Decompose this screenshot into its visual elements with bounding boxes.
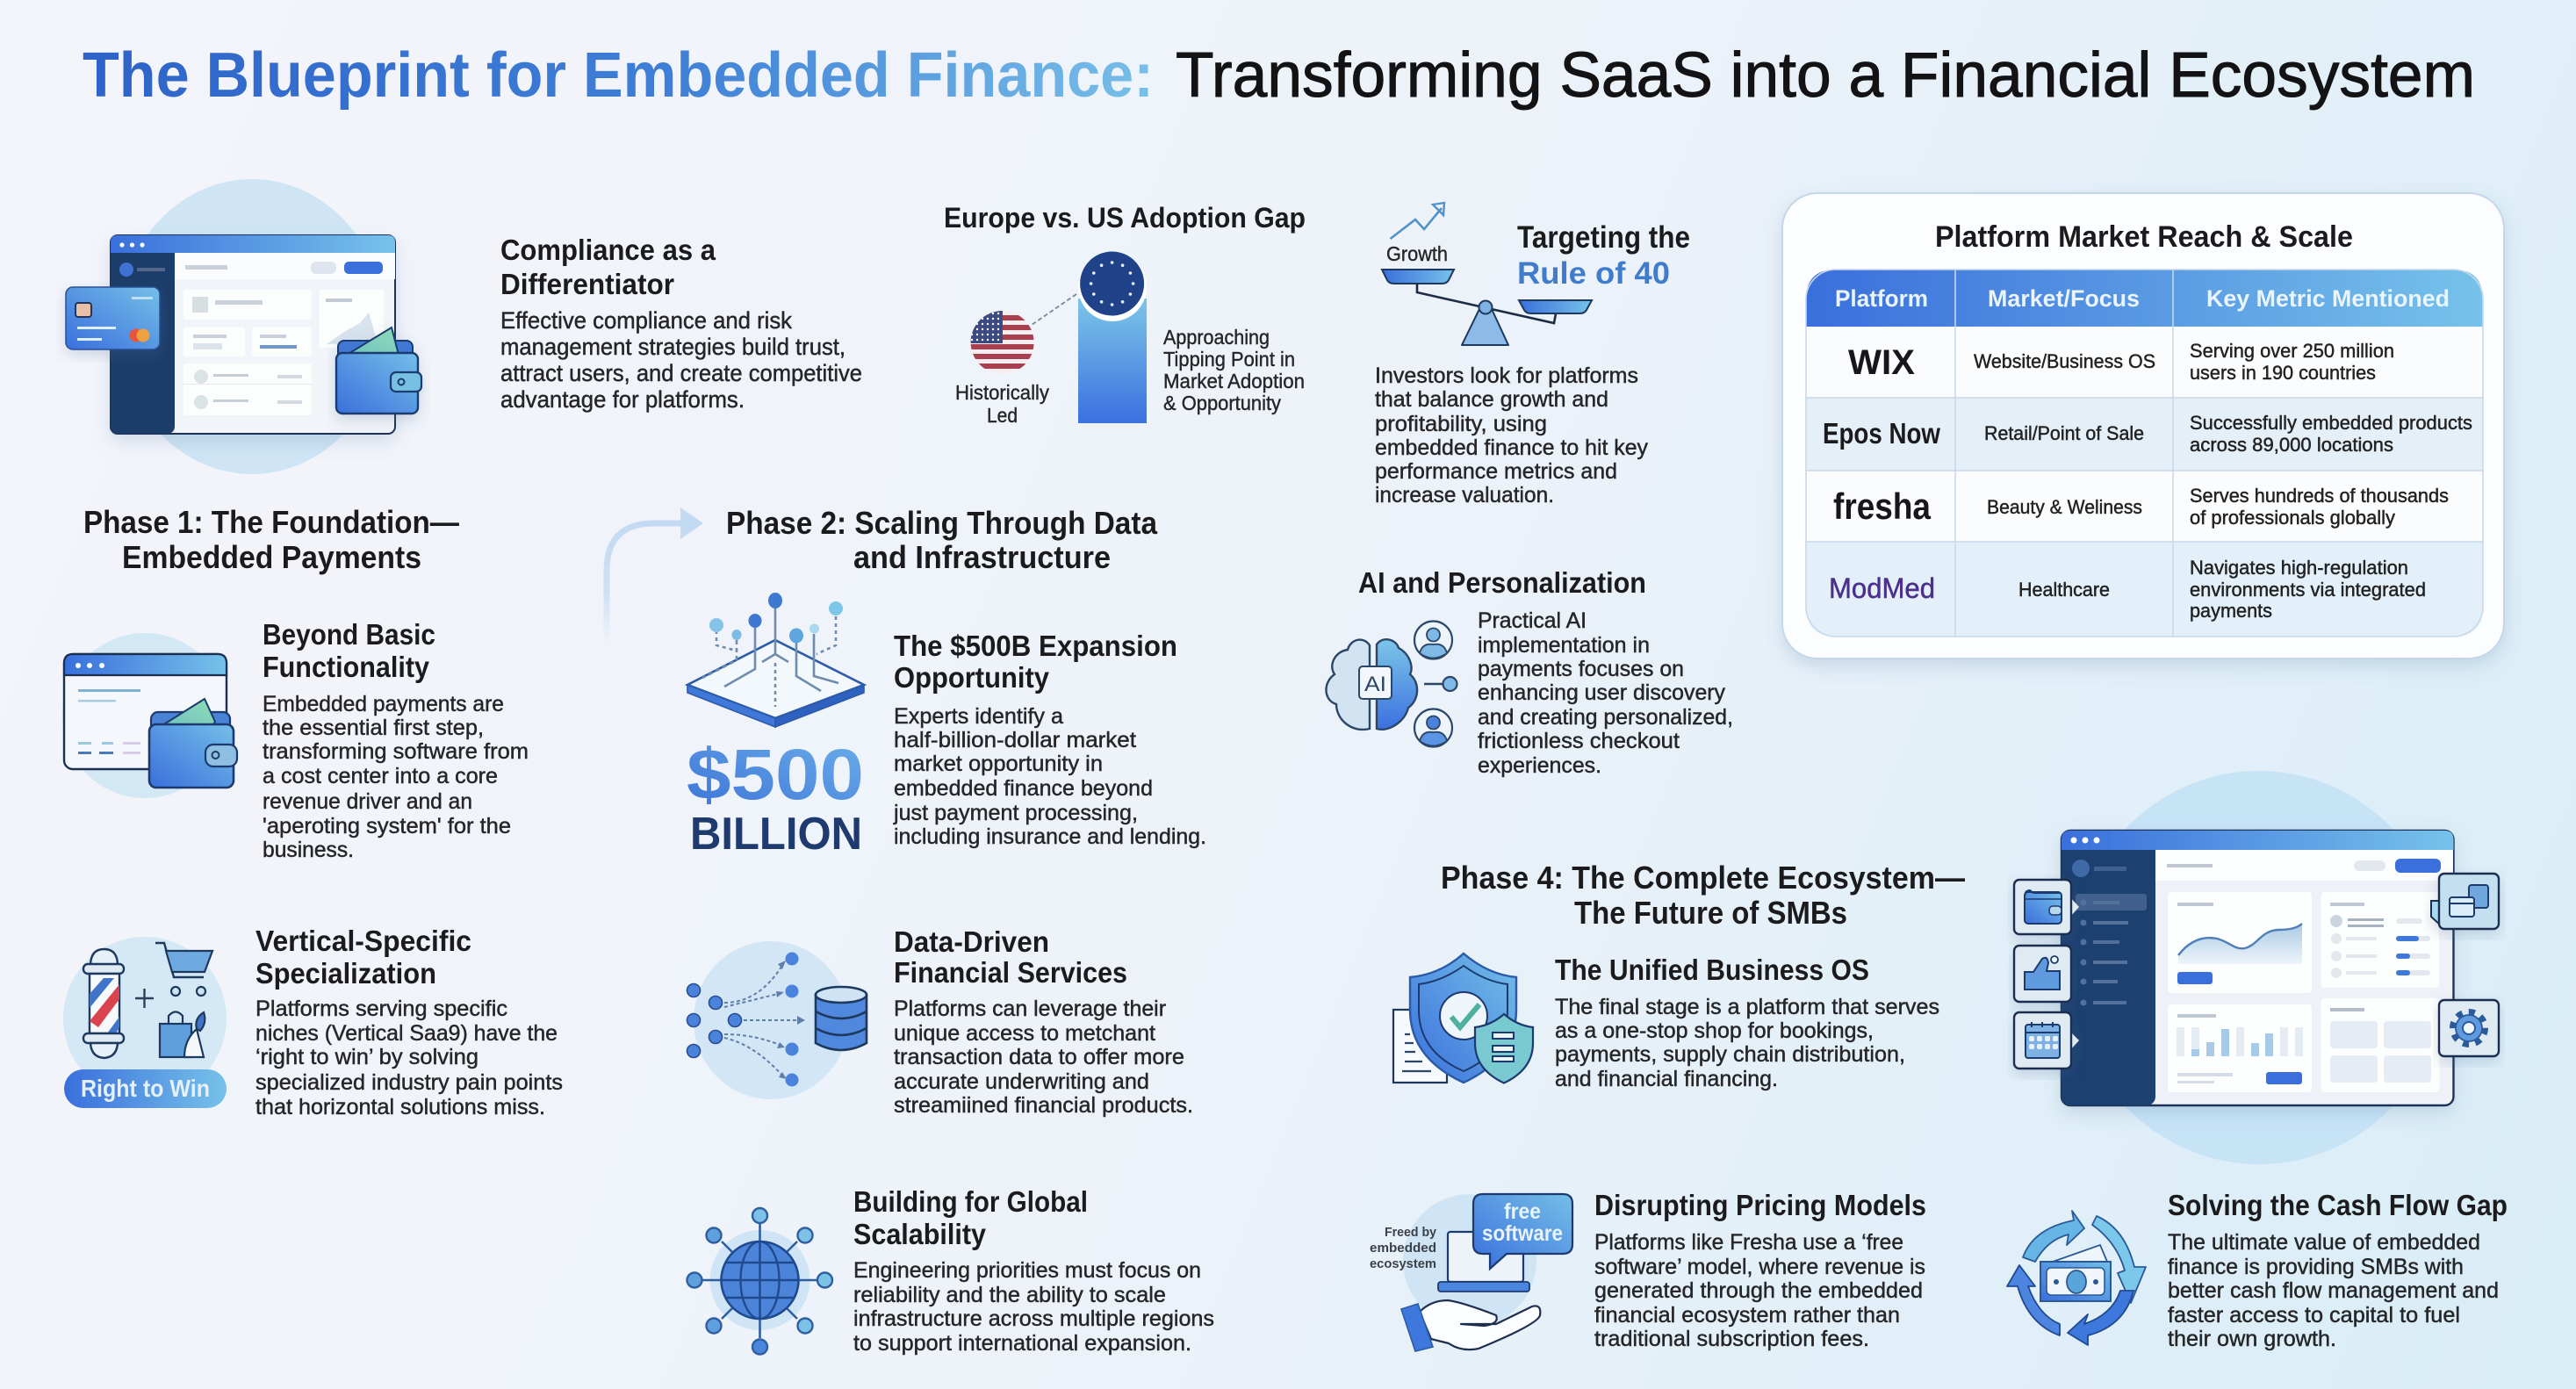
row: Wix: Website/Business OS bbox=[1974, 350, 2155, 372]
text block: vertical-specific specialization: that horizontal solutions miss. bbox=[255, 1095, 545, 1119]
card: line chart bbox=[2168, 892, 2312, 993]
label: approaching tipping point bbox=[1163, 326, 1305, 414]
title bbox=[83, 40, 2475, 111]
row: ModMed bbox=[1829, 557, 2426, 622]
text block: vertical-specific specialization: niches (Vertical Saa9) have the bbox=[255, 1021, 558, 1046]
card: bar chart bbox=[2168, 1004, 2312, 1092]
text block: building for global scalability: to support international expansion. bbox=[853, 1331, 1191, 1356]
text block: disrupting pricing models: software’ model, where revenue is bbox=[1594, 1255, 1925, 1279]
text block: vertical-specific specialization: ‘right to win’ by solving bbox=[255, 1045, 479, 1069]
icon: free software hand and laptop bbox=[1370, 1194, 1572, 1351]
header row: Market/Focus bbox=[1988, 285, 2140, 312]
label: freed by embedded ecosystem: Freed by bbox=[1385, 1225, 1437, 1240]
heading: Europe vs. US Adoption Gap bbox=[944, 202, 1306, 234]
text block: compliance as a differentiator: attract users, and create competitive bbox=[500, 360, 862, 386]
text block: data-driven financial services: transaction data to offer more bbox=[894, 1045, 1184, 1069]
speech bubble: free software: software bbox=[1482, 1221, 1563, 1246]
row: Epos Now bbox=[1823, 412, 2472, 456]
row: Epos Now: across 89,000 locations bbox=[2190, 434, 2393, 456]
heading bbox=[1517, 220, 1690, 291]
text block: disrupting pricing models: Platforms like Fresha use a ‘free bbox=[1594, 1230, 1903, 1255]
icon: US flag bbox=[970, 311, 1034, 374]
body text: AI and personalization: experiences. bbox=[1478, 753, 1601, 778]
text block: $500B expansion opportunity: embedded finance beyond bbox=[894, 776, 1153, 801]
label: freed by embedded ecosystem: ecosystem bbox=[1370, 1256, 1436, 1271]
text block: unified business OS: The final stage is a platform that serves bbox=[1555, 995, 1939, 1019]
text block: building for global scalability: Engineering priorities must focus on bbox=[853, 1258, 1201, 1283]
body text: AI and personalization: implementation in bbox=[1478, 633, 1650, 658]
icon: banknote bbox=[2040, 1245, 2111, 1301]
label: freed by embedded ecosystem bbox=[1370, 1225, 1437, 1271]
icon: person bottom bbox=[1414, 709, 1452, 746]
text block: compliance as a differentiator: Effective compliance and risk bbox=[500, 307, 793, 334]
text block: $500B expansion opportunity: including insurance and lending. bbox=[894, 824, 1206, 849]
text block: compliance as a differentiator bbox=[500, 234, 862, 413]
text block: unified business OS: as a one-stop shop for bookings, bbox=[1555, 1018, 1874, 1043]
text block: $500B expansion opportunity: half-billion-dollar market bbox=[894, 728, 1136, 752]
text block: vertical-specific specialization: Vertical-Specific bbox=[255, 925, 471, 957]
text block: beyond basic functionality: Beyond Basic bbox=[263, 618, 435, 651]
label: freed by embedded ecosystem: embedded bbox=[1370, 1241, 1436, 1256]
row: Epos Now: Successfully embedded products bbox=[2190, 412, 2472, 434]
text block: disrupting pricing models: Disrupting Pricing Models bbox=[1594, 1189, 1926, 1221]
text block: solving the cash flow gap bbox=[2168, 1189, 2508, 1351]
text block: data-driven financial services: accurate underwriting and bbox=[894, 1069, 1149, 1094]
label: approaching tipping point: Tipping Point in bbox=[1163, 348, 1295, 371]
label: historically led: Historically bbox=[955, 381, 1049, 404]
text block: vertical-specific specialization bbox=[255, 925, 563, 1119]
text block: unified business OS bbox=[1555, 954, 1939, 1091]
illustration: complete ecosystem dashboard bbox=[2014, 771, 2499, 1164]
icon: window with wallet bbox=[62, 633, 237, 798]
heading: phase 2 bbox=[726, 505, 1158, 575]
table heading: Platform Market Reach & Scale bbox=[1935, 220, 2353, 254]
label: approaching tipping point: Market Adoption bbox=[1163, 370, 1305, 392]
icon: database bbox=[816, 987, 867, 1050]
heading: phase 4 bbox=[1441, 860, 1965, 931]
credit card bbox=[66, 287, 160, 349]
dashboard window bbox=[111, 235, 395, 434]
header row bbox=[1835, 285, 2450, 312]
row: ModMed: ModMed bbox=[1829, 572, 1935, 604]
body text: AI and personalization: enhancing user discovery bbox=[1478, 680, 1725, 705]
label: historically led: Led bbox=[987, 404, 1018, 427]
dashboard window bbox=[2062, 831, 2453, 1105]
row: Fresha: Serves hundreds of thousands bbox=[2190, 485, 2449, 507]
text block: building for global scalability: infrastructure across multiple regions bbox=[853, 1306, 1214, 1331]
text block: beyond basic functionality: Functionality bbox=[263, 651, 430, 683]
tile: gear bbox=[2439, 1000, 2499, 1056]
row: Epos Now: Epos Now bbox=[1823, 417, 1940, 450]
text block: compliance as a differentiator: Differentiator bbox=[500, 268, 674, 300]
label: historically led bbox=[955, 381, 1049, 427]
body text: AI and personalization: and creating personalized, bbox=[1478, 705, 1733, 730]
panel: Europe vs US adoption gap bbox=[944, 202, 1306, 427]
text block: compliance as a differentiator: management strategies build trust, bbox=[500, 334, 845, 360]
heading: phase 2: and Infrastructure bbox=[853, 539, 1111, 575]
text block: solving the cash flow gap: their own growth. bbox=[2168, 1327, 2336, 1351]
heading: phase 2: Phase 2: Scaling Through Data bbox=[726, 505, 1158, 541]
text block: beyond basic functionality bbox=[263, 618, 529, 862]
text block: vertical-specific specialization: Platforms serving specific bbox=[255, 997, 507, 1021]
table bbox=[1806, 270, 2483, 637]
text block: beyond basic functionality: a cost center into a core bbox=[263, 764, 498, 788]
row: Fresha: fresha bbox=[1833, 486, 1932, 527]
body text bbox=[1375, 363, 1648, 507]
dashed connector bbox=[1032, 294, 1076, 325]
text block: disrupting pricing models: financial ecosystem rather than bbox=[1594, 1303, 1900, 1328]
speech bubble: free software bbox=[1473, 1194, 1572, 1269]
text block: unified business OS: and financial financing. bbox=[1555, 1067, 1778, 1091]
heading: Targeting the bbox=[1517, 220, 1690, 255]
text block: building for global scalability: Building for Global bbox=[853, 1185, 1088, 1218]
icon: bag and bottle bbox=[160, 1011, 205, 1057]
heading: phase 4: The Future of SMBs bbox=[1574, 895, 1847, 931]
title: Transforming SaaS into a Financial Ecosystem bbox=[1176, 40, 2475, 111]
header row: Platform bbox=[1835, 285, 1928, 312]
heading: Rule of 40 bbox=[1517, 256, 1670, 291]
icon: EU flag bbox=[1080, 251, 1144, 316]
text block: data-driven financial services: unique access to metchant bbox=[894, 1021, 1155, 1046]
row: ModMed: environments via integrated bbox=[2190, 579, 2426, 601]
row: Fresha: Beauty & Weliness bbox=[1987, 496, 2142, 518]
icon: shopping cart bbox=[155, 943, 212, 996]
text block: solving the cash flow gap: faster access to capital to fuel bbox=[2168, 1303, 2460, 1328]
text block: unified business OS: payments, supply chain distribution, bbox=[1555, 1042, 1905, 1067]
illustration: dashboard with card and wallet bbox=[66, 179, 421, 474]
row: ModMed: payments bbox=[2190, 600, 2272, 622]
text block: vertical-specific specialization: specialized industry pain points bbox=[255, 1070, 563, 1095]
text block: beyond basic functionality: transforming software from bbox=[263, 739, 529, 764]
heading: phase 4: Phase 4: The Complete Ecosystem— bbox=[1441, 860, 1965, 896]
text block: disrupting pricing models: traditional subscription fees. bbox=[1594, 1327, 1869, 1351]
icon: data flow to database bbox=[687, 941, 867, 1099]
heading: phase 1: Phase 1: The Foundation— bbox=[83, 504, 459, 540]
text block: $500B expansion opportunity: market opportunity in bbox=[894, 752, 1103, 776]
body text: AI and personalization: Practical AI bbox=[1478, 608, 1587, 633]
arrow: phase 1 to phase 2 bbox=[607, 507, 703, 645]
body text: profitability, using bbox=[1375, 412, 1547, 436]
body text: increase valuation. bbox=[1375, 483, 1554, 507]
text block: building for global scalability: reliability and the ability to scale bbox=[853, 1283, 1166, 1307]
tile: wallet bbox=[2014, 880, 2079, 934]
stat: $500 billion bbox=[687, 735, 864, 860]
text block: beyond basic functionality: 'aperoting system' for the bbox=[263, 814, 511, 838]
body text: AI and personalization bbox=[1478, 608, 1733, 778]
text block: $500B expansion opportunity bbox=[893, 630, 1206, 849]
stat: $500 billion: BILLION bbox=[690, 809, 862, 860]
text block: compliance as a differentiator: advantage for platforms. bbox=[500, 386, 745, 413]
pill: right to win bbox=[64, 1069, 227, 1108]
text block: beyond basic functionality: revenue driver and an bbox=[263, 789, 472, 814]
text block: beyond basic functionality: Embedded payments are bbox=[263, 692, 504, 716]
row: ModMed: Navigates high-regulation bbox=[2190, 557, 2408, 579]
row: Wix bbox=[1848, 340, 2394, 384]
bar: adoption bbox=[1078, 299, 1147, 423]
tile: calendar bbox=[2014, 1012, 2079, 1069]
body text: AI and personalization: frictionless checkout bbox=[1478, 729, 1680, 753]
text block: solving the cash flow gap: finance is providing SMBs with bbox=[2168, 1255, 2464, 1279]
text block: $500B expansion opportunity: Experts identify a bbox=[894, 704, 1063, 729]
text block: $500B expansion opportunity: just payment processing, bbox=[893, 801, 1138, 825]
icon: open hand bbox=[1401, 1300, 1540, 1351]
row: Wix: Serving over 250 million bbox=[2190, 340, 2394, 362]
text block: data-driven financial services: Financial Services bbox=[894, 956, 1127, 989]
text block: compliance as a differentiator: Compliance as a bbox=[500, 234, 716, 266]
body text: Investors look for platforms bbox=[1375, 363, 1638, 388]
row: Wix: WIX bbox=[1848, 343, 1915, 382]
label: approaching tipping point: Approaching bbox=[1163, 326, 1270, 349]
row: Fresha: of professionals globally bbox=[2190, 507, 2395, 529]
row: Fresha bbox=[1833, 485, 2449, 529]
body text: performance metrics and bbox=[1375, 459, 1617, 484]
text block: disrupting pricing models: generated through the embedded bbox=[1594, 1278, 1923, 1303]
icon: circuit platform bbox=[687, 593, 864, 727]
body text: that balance growth and bbox=[1375, 387, 1608, 412]
icon: network globe bbox=[687, 1208, 832, 1354]
card: list with progress bbox=[2321, 892, 2439, 988]
card: tiles bbox=[2321, 998, 2439, 1092]
text block: $500B expansion opportunity: Opportunity bbox=[894, 661, 1050, 694]
icon: barber pole bbox=[83, 949, 124, 1058]
icon: balance scale with growth arrow: Growth bbox=[1386, 242, 1448, 265]
text block: data-driven financial services: Platforms can leverage their bbox=[894, 997, 1166, 1021]
row: Epos Now: Retail/Point of Sale bbox=[1984, 422, 2144, 444]
text block: data-driven financial services: Data-Driven bbox=[894, 925, 1049, 958]
icon: laptop bbox=[1438, 1232, 1529, 1292]
heading: AI and personalization: AI and Personalization bbox=[1358, 566, 1646, 599]
icon: balance scale with growth arrow bbox=[1382, 203, 1592, 345]
panel: platform market reach table bbox=[1782, 193, 2504, 659]
stat: $500 billion: $500 bbox=[687, 735, 864, 815]
icon: AI brain bbox=[1326, 622, 1457, 746]
icon: right to win niche icons bbox=[63, 937, 227, 1108]
heading: phase 1 bbox=[83, 504, 459, 575]
text block: data-driven financial services: streamiined financial products. bbox=[894, 1093, 1193, 1118]
icon: small shield bbox=[1475, 1014, 1533, 1083]
label: approaching tipping point: & Opportunity bbox=[1163, 392, 1281, 414]
text block: disrupting pricing models bbox=[1594, 1189, 1926, 1351]
text block: solving the cash flow gap: Solving the Cash Flow Gap bbox=[2168, 1189, 2508, 1221]
icon: AI brain: AI bbox=[1364, 673, 1386, 696]
icon: shield with document bbox=[1393, 954, 1533, 1083]
wallet bbox=[336, 327, 421, 414]
text block: solving the cash flow gap: better cash flow management and bbox=[2168, 1278, 2499, 1303]
icon: person top bbox=[1414, 622, 1452, 659]
heading: phase 1: Embedded Payments bbox=[122, 539, 421, 575]
body text: AI and personalization: payments focuses on bbox=[1478, 657, 1684, 681]
cycle arrows bbox=[2007, 1211, 2146, 1345]
tile: cards bbox=[2431, 874, 2499, 929]
tile: thumbs up bbox=[2014, 946, 2071, 1002]
text block: data-driven financial services bbox=[894, 925, 1193, 1118]
text block: beyond basic functionality: the essential first step, bbox=[263, 716, 484, 740]
row: Wix: users in 190 countries bbox=[2190, 362, 2376, 384]
text block: solving the cash flow gap: The ultimate value of embedded bbox=[2168, 1230, 2480, 1255]
panel: Rule of 40 bbox=[1375, 203, 1690, 507]
pill: right to win: Right to Win bbox=[81, 1075, 210, 1102]
card bbox=[1782, 193, 2504, 659]
text block: vertical-specific specialization: Specialization bbox=[255, 957, 436, 990]
text block: building for global scalability bbox=[853, 1185, 1214, 1356]
row: ModMed: Healthcare bbox=[2018, 579, 2110, 601]
header row: Key Metric Mentioned bbox=[2206, 285, 2450, 312]
body text: embedded finance to hit key bbox=[1375, 435, 1648, 460]
speech bubble: free software: free bbox=[1504, 1199, 1541, 1224]
text block: beyond basic functionality: business. bbox=[263, 838, 354, 862]
icon: cash flow cycle bbox=[2007, 1211, 2146, 1345]
text block: building for global scalability: Scalability bbox=[853, 1218, 987, 1250]
text block: unified business OS: The Unified Business OS bbox=[1555, 954, 1869, 986]
plus sign bbox=[135, 989, 154, 1008]
text block: $500B expansion opportunity: The $500B Expansion bbox=[894, 630, 1177, 662]
title: The Blueprint for Embedded Finance: bbox=[83, 40, 1154, 111]
